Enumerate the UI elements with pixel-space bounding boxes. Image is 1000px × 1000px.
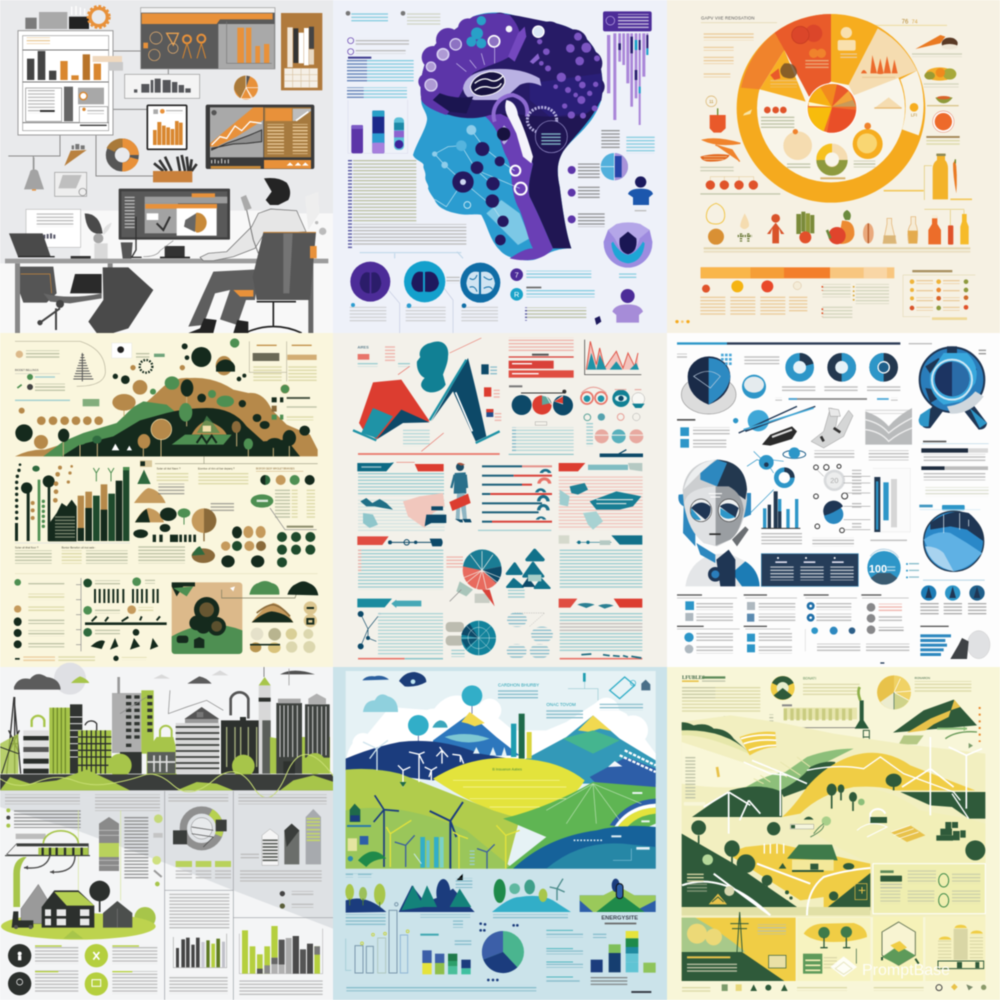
turbines and trees	[684, 737, 985, 901]
section: left text block	[357, 536, 443, 590]
circular robot device	[919, 346, 987, 430]
right column food icons	[884, 35, 972, 209]
person icon purple	[612, 289, 643, 323]
brown poster with bars	[281, 13, 322, 90]
outline bar chart	[346, 903, 409, 973]
trees on mountain	[15, 338, 310, 456]
train and arrows	[5, 831, 90, 907]
panel: robot and blue technology	[667, 333, 1000, 667]
person icon blue	[628, 176, 653, 212]
tower bars right	[240, 809, 322, 909]
header label top right	[603, 11, 652, 125]
stats table right	[921, 441, 989, 496]
small scene cards	[345, 872, 656, 926]
panel: teal and red journey charts	[333, 333, 668, 667]
farmland main	[682, 715, 985, 917]
row of food icons	[704, 203, 970, 253]
robot face	[678, 460, 760, 586]
sphere map	[919, 505, 984, 571]
teal circle chart	[446, 621, 496, 657]
numbered notes: R	[514, 290, 519, 299]
skyline	[0, 663, 330, 775]
top figures: 76	[902, 20, 909, 26]
clouds and headings: CARDHON BHURBY	[498, 682, 539, 687]
horizontal bar table	[478, 465, 552, 532]
numbered notes: 7	[515, 270, 519, 279]
intro texts	[5, 794, 327, 900]
clouds and headings: ONAC TOVOM	[546, 702, 576, 707]
ground waves	[0, 754, 334, 798]
main wheel chart	[737, 14, 925, 203]
triangle cluster	[507, 550, 550, 598]
numbered notes	[510, 268, 601, 325]
left column notes	[700, 32, 780, 195]
circle charts row	[509, 385, 574, 454]
teal blob labels	[507, 612, 553, 659]
circular callout diagram	[812, 464, 870, 546]
top figures	[874, 20, 947, 26]
satellite dish sketch	[677, 406, 815, 448]
section: right text block	[559, 535, 642, 588]
small text blocks and circle chart right	[568, 130, 655, 227]
circular callout diagram: 20	[830, 476, 838, 485]
pencil holder	[153, 155, 197, 182]
heading: RONARON	[915, 676, 930, 680]
wheel illustrations	[761, 25, 918, 179]
top notes	[15, 341, 317, 420]
info card right	[873, 864, 985, 914]
shield segment chart	[604, 222, 652, 278]
head silhouette	[413, 12, 605, 260]
panel: human head and brain	[333, 0, 668, 334]
panel: green energy hills	[333, 667, 668, 1000]
gradient bar	[701, 267, 894, 278]
panel: office analytics desk scene	[0, 0, 334, 334]
pie chart	[234, 76, 258, 100]
middle notes and shapes: Solar oil titul Naen ?	[157, 467, 181, 471]
panel: yellow and green farmland	[667, 667, 1000, 1000]
hills: B Insuanon Aabes	[492, 767, 522, 771]
factory towers	[473, 714, 532, 759]
red and blue radial pie	[446, 550, 502, 606]
paper sheet	[26, 209, 81, 247]
middle notes and shapes: Ecenise of riim oil bar deparq ?	[198, 467, 235, 471]
shelf items and gear icon	[25, 6, 110, 29]
stacked bars right	[346, 931, 656, 993]
calendar sketch card	[55, 172, 87, 196]
text columns left	[346, 11, 466, 250]
house scene	[1, 881, 156, 940]
round icons and lists	[8, 944, 157, 996]
robot hand	[811, 408, 854, 459]
desktop monitor	[119, 189, 230, 240]
large orange monitor with line chart	[206, 105, 314, 169]
panel: forest and mountain ecology	[0, 333, 334, 667]
world map section	[559, 463, 643, 530]
top red table	[509, 338, 574, 378]
report panel with bar chart	[18, 31, 123, 135]
right circle grid: BIOFOR GEOF WHOLET BRANSES	[256, 468, 295, 471]
panel: green city and charts	[0, 663, 334, 1000]
three coloured badges	[920, 580, 986, 615]
stacked bar chart center	[420, 920, 471, 974]
top progress bar	[677, 341, 932, 346]
mountain chart with figure	[353, 338, 501, 454]
connector lines	[8, 51, 168, 176]
brain lobes and circles	[425, 16, 600, 163]
wind turbines	[363, 740, 520, 869]
right bottom mounds	[249, 581, 318, 653]
line area chart	[585, 340, 641, 375]
heading: BDNATI	[803, 676, 816, 680]
donut chart	[110, 143, 134, 167]
plant	[85, 213, 112, 259]
axis line and small nodes	[360, 252, 463, 258]
eye and gauge icons	[581, 387, 645, 455]
top figures: 74	[912, 20, 918, 26]
mountain chart with figure: AIRES	[358, 345, 369, 349]
cone chart icon	[64, 144, 87, 166]
hanging lamp	[24, 157, 44, 191]
ring chart	[173, 810, 231, 880]
left office chair	[20, 267, 102, 330]
cylinder bar chart	[348, 100, 408, 153]
text and bar chart bottom center	[169, 894, 229, 994]
circle brain icons	[350, 261, 500, 333]
heading	[682, 675, 971, 753]
bar chart forest: Bontor Benefon oil inot aale :	[62, 546, 96, 550]
section: red fish text	[559, 599, 642, 659]
food legend row	[675, 280, 889, 323]
bottom left legend and mini charts	[14, 577, 167, 662]
section: network text	[357, 599, 443, 659]
bottom legend	[682, 984, 986, 992]
wheel illustrations: LFI	[911, 112, 917, 117]
globe on plate	[677, 354, 779, 414]
farmhouse	[687, 844, 867, 904]
100 gauge: 100	[869, 563, 887, 575]
person at desk	[188, 178, 326, 333]
heading: LFUBLES	[682, 676, 705, 681]
vertical bar chart panel	[870, 468, 910, 542]
network nodes and bar chart	[747, 447, 806, 544]
PromptBase watermark	[830, 956, 950, 979]
section: map left	[357, 462, 446, 531]
100 gauge	[867, 549, 919, 585]
tablet with orange bar chart	[147, 105, 187, 149]
desk items	[71, 217, 190, 259]
illustrated tree card	[172, 582, 297, 654]
dashboard screen with orange bars	[141, 8, 275, 69]
bar chart forest	[15, 463, 130, 564]
left column notes: 11	[709, 99, 714, 104]
right circle grid	[15, 468, 318, 574]
clouds and headings	[346, 672, 656, 767]
mountain top right	[893, 700, 980, 758]
bar chart forest: Solar oil tihal flour ?	[15, 546, 39, 550]
mountain landscape	[15, 378, 318, 456]
chart card	[125, 74, 200, 98]
panel: food nutrition wheel	[667, 0, 1000, 334]
filing cabinet shape	[88, 267, 153, 333]
PromptBase watermark: PromptBase	[862, 962, 950, 979]
bottom cards	[682, 912, 985, 981]
mountains	[346, 712, 656, 787]
facial network nodes	[432, 125, 527, 245]
top notes: BIODET BELLINGS	[15, 368, 39, 372]
pie chart	[479, 922, 583, 983]
dividers	[165, 791, 333, 1000]
desk	[5, 259, 328, 333]
trees	[108, 753, 326, 928]
three donuts	[775, 357, 900, 401]
person with folder	[449, 463, 472, 522]
small scene cards: ENERGYSITE	[601, 915, 638, 921]
feature list lower grid	[677, 594, 909, 664]
laptop	[9, 233, 55, 257]
title: GAPV VIIE RENOSATION	[701, 16, 755, 21]
middle notes and shapes	[133, 456, 318, 563]
dark summary table	[761, 554, 858, 586]
legend box	[903, 270, 975, 320]
bar towers in field	[347, 804, 475, 868]
hills	[346, 758, 656, 869]
bar chart right bottom	[239, 926, 323, 995]
title	[701, 16, 777, 23]
wave panel	[865, 408, 912, 460]
stacked tower chart	[99, 814, 163, 886]
blue list with sphere	[920, 626, 990, 659]
